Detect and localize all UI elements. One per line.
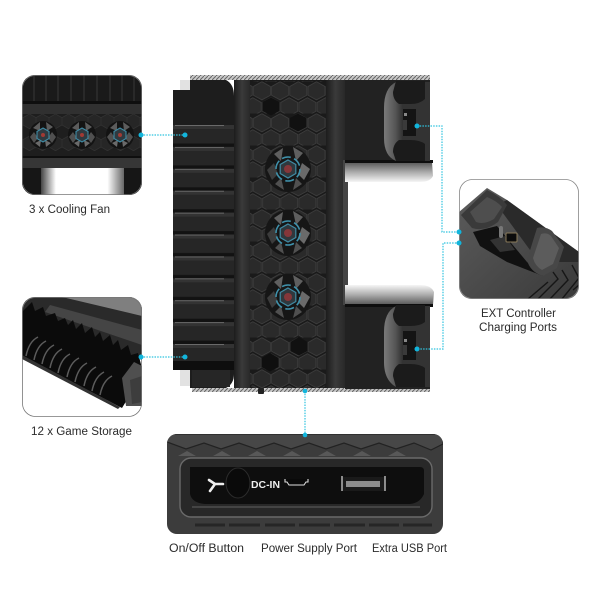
bezel lower highlight <box>192 506 420 508</box>
bottom edge strip <box>192 388 430 392</box>
spine behind gap <box>343 160 348 305</box>
on/off button <box>226 468 250 498</box>
power port <box>285 479 308 485</box>
label: controller ports: Charging Ports <box>479 322 557 334</box>
bezel <box>180 458 432 517</box>
panel: game storage outline <box>22 298 142 416</box>
callout: top port line <box>414 124 462 234</box>
center column right <box>326 80 345 388</box>
tread <box>528 265 579 299</box>
bottom controller dock <box>345 285 434 389</box>
white corner top <box>180 80 192 90</box>
panel: controller charging port detail <box>459 179 579 299</box>
panel: cooling fan detail <box>22 75 142 195</box>
power switch <box>258 388 264 394</box>
callout: bottom port line <box>414 240 462 352</box>
fan <box>265 210 311 256</box>
panel: game storage detail <box>22 297 142 417</box>
center column left <box>234 80 250 388</box>
callout: rear port line <box>303 389 307 437</box>
usb port <box>342 476 385 491</box>
hex panel backing <box>250 80 326 388</box>
panel: controller outline <box>460 180 578 298</box>
inner recess <box>190 467 424 504</box>
top controller dock <box>345 80 433 182</box>
main device: charging dock stand <box>173 75 434 394</box>
panel: port close-up <box>167 434 443 534</box>
label: on/off button: On/Off Button <box>169 543 244 555</box>
label: extra USB port: Extra USB Port <box>372 543 448 555</box>
tread triangles <box>178 451 406 456</box>
white corner bottom <box>180 370 192 386</box>
label: controller ports: EXT Controller <box>481 308 556 320</box>
comb <box>22 302 142 408</box>
comb fins <box>26 337 112 395</box>
fan symbol <box>209 480 223 491</box>
dc-in label: DC-IN <box>251 479 280 491</box>
charging pin <box>499 226 503 238</box>
top edge strip <box>190 75 430 80</box>
bottom tread <box>195 524 432 526</box>
fan <box>265 274 311 320</box>
left game storage block <box>173 80 234 388</box>
callout: cooling fan line <box>138 132 188 138</box>
callout: game storage line <box>138 354 188 360</box>
label: game storage: 12 x Game Storage <box>31 426 132 438</box>
label: controller ports <box>479 308 557 334</box>
tread top band <box>167 434 443 450</box>
hex panel <box>250 81 326 388</box>
panel: cooling fan outline <box>22 76 142 194</box>
label: power supply port: Power Supply Port <box>261 543 358 555</box>
label: cooling fan: 3 x Cooling Fan <box>29 204 110 216</box>
fan <box>265 146 311 192</box>
